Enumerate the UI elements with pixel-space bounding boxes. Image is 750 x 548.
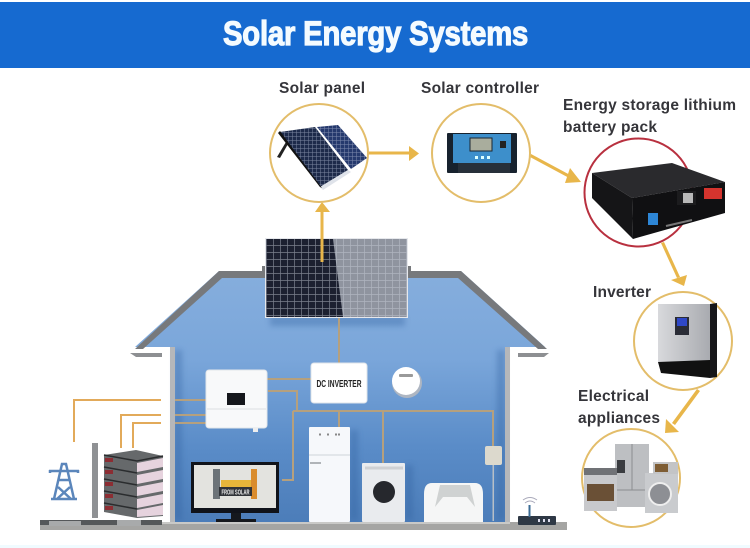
router: [518, 498, 556, 525]
DC inverter box: [311, 363, 367, 403]
label: electrical appliances: Electrical: [578, 388, 649, 405]
title: Solar Energy Systems: [223, 14, 528, 53]
circle: solar panel: [270, 104, 368, 202]
power tower: [49, 464, 79, 499]
rooftop solar panel: [262, 238, 411, 318]
arrow: solar panel to controller: [368, 146, 419, 161]
shadows on wall: [174, 316, 505, 520]
header banner: [0, 2, 750, 68]
roof edge: [135, 271, 547, 349]
television: [191, 462, 279, 522]
arrow: battery to inverter: [661, 242, 687, 286]
circle: inverter: [634, 292, 732, 390]
washing machine: [362, 463, 405, 522]
wiring: [175, 317, 493, 480]
armchair: [424, 483, 483, 522]
label: battery pack: battery pack: [563, 119, 657, 136]
eaves: [130, 353, 549, 357]
arrow: inverter to appliances: [665, 389, 700, 433]
arrow: controller to battery: [530, 154, 581, 183]
label: electrical appliances: appliances: [578, 410, 660, 427]
house: [40, 271, 567, 530]
DC inverter box: DC INVERTER: [316, 379, 362, 390]
label: solar panel: Solar panel: [279, 80, 365, 97]
house wall and roof: [135, 271, 545, 522]
television: FROM SOLAR: [222, 490, 250, 496]
circle: electrical appliances: [582, 429, 680, 527]
wall lamp: [485, 446, 502, 521]
label: inverter: Inverter: [593, 284, 651, 301]
circle: battery pack: [584, 138, 725, 246]
label: solar controller: Solar controller: [421, 80, 539, 97]
hybrid inverter: [206, 370, 267, 432]
arrow: roof to solar panel: [315, 202, 330, 262]
outdoor divider: [92, 443, 98, 518]
refrigerator: [309, 427, 350, 522]
label: battery pack: Energy storage lithium: [563, 97, 736, 114]
floor: [40, 520, 567, 530]
outdoor grid wiring: [74, 400, 161, 448]
thermostat: [392, 367, 422, 398]
circle: solar controller: [432, 104, 530, 202]
battery stack: [104, 450, 163, 518]
